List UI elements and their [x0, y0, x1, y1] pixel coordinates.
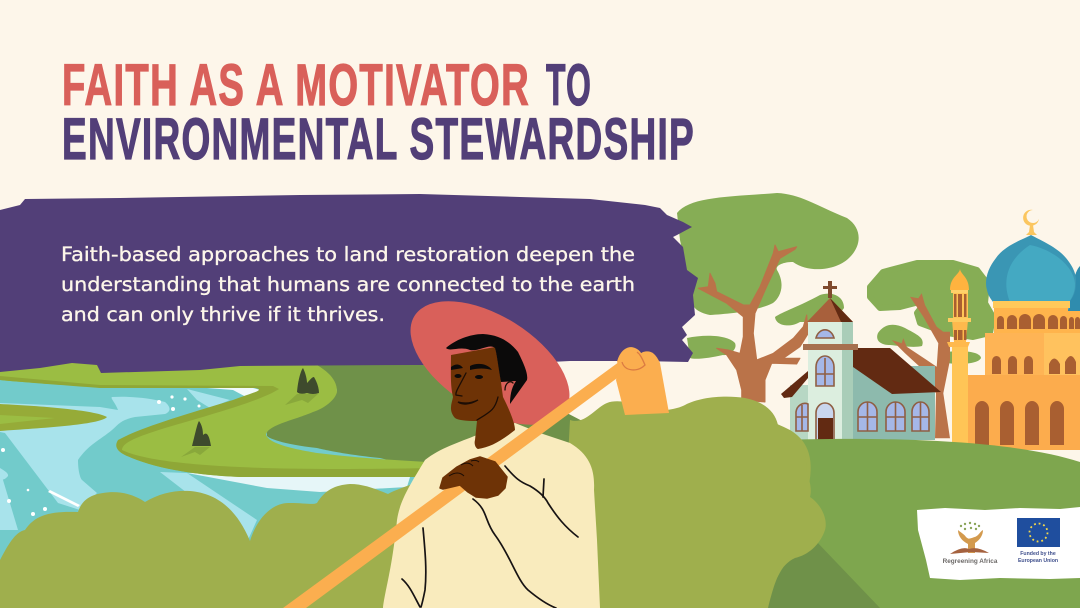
shirt folds [402, 466, 578, 608]
title [62, 53, 695, 172]
hoe handle [283, 359, 628, 608]
funding text: European Union [1018, 558, 1058, 564]
text block: body copy: understanding that humans are connected to the earth [61, 273, 635, 296]
island [0, 404, 107, 431]
hat [390, 276, 590, 450]
church windows [796, 330, 929, 440]
hair [446, 334, 527, 404]
shirt [383, 423, 600, 608]
icon: Regreening Africa logo [943, 522, 998, 565]
title: ENVIRONMENTAL STEWARDSHIP [62, 107, 695, 172]
funding text [1018, 551, 1058, 564]
river highlights [0, 388, 410, 540]
title: TO [546, 53, 592, 118]
icon: EU flag [1017, 518, 1060, 547]
hoe grip [617, 347, 643, 370]
illustration: right hill [660, 407, 1080, 608]
neck and face [451, 347, 515, 449]
hoe blade [616, 351, 669, 415]
title: FAITH AS A MOTIVATOR [62, 53, 530, 118]
illustration: farmer with hoe [283, 276, 669, 608]
panel: purple torn banner [0, 194, 698, 373]
dark green hill [267, 360, 590, 475]
illustration: river landscape [0, 356, 590, 572]
illustration: right bush [560, 397, 826, 608]
icon: trees on peninsula [181, 368, 319, 457]
illustration: church [781, 281, 941, 440]
hand [440, 457, 507, 498]
illustration: second tree [870, 263, 993, 438]
text block: body copy [61, 243, 635, 326]
logo panel [917, 507, 1080, 580]
face details [456, 373, 513, 420]
peninsula [0, 356, 430, 477]
funding text: Funded by the [1020, 551, 1056, 557]
illustration: left bush [0, 484, 430, 608]
illustration: mosque [947, 210, 1080, 450]
text block: body copy: and can only thrive if it thrives. [61, 303, 385, 326]
torn white background [917, 507, 1080, 580]
text block: body copy: Faith-based approaches to land restoration deepen the [61, 243, 635, 266]
icon: Regreening Africa logo: Regreening Africa [943, 558, 998, 565]
illustration: large tree [677, 193, 859, 402]
